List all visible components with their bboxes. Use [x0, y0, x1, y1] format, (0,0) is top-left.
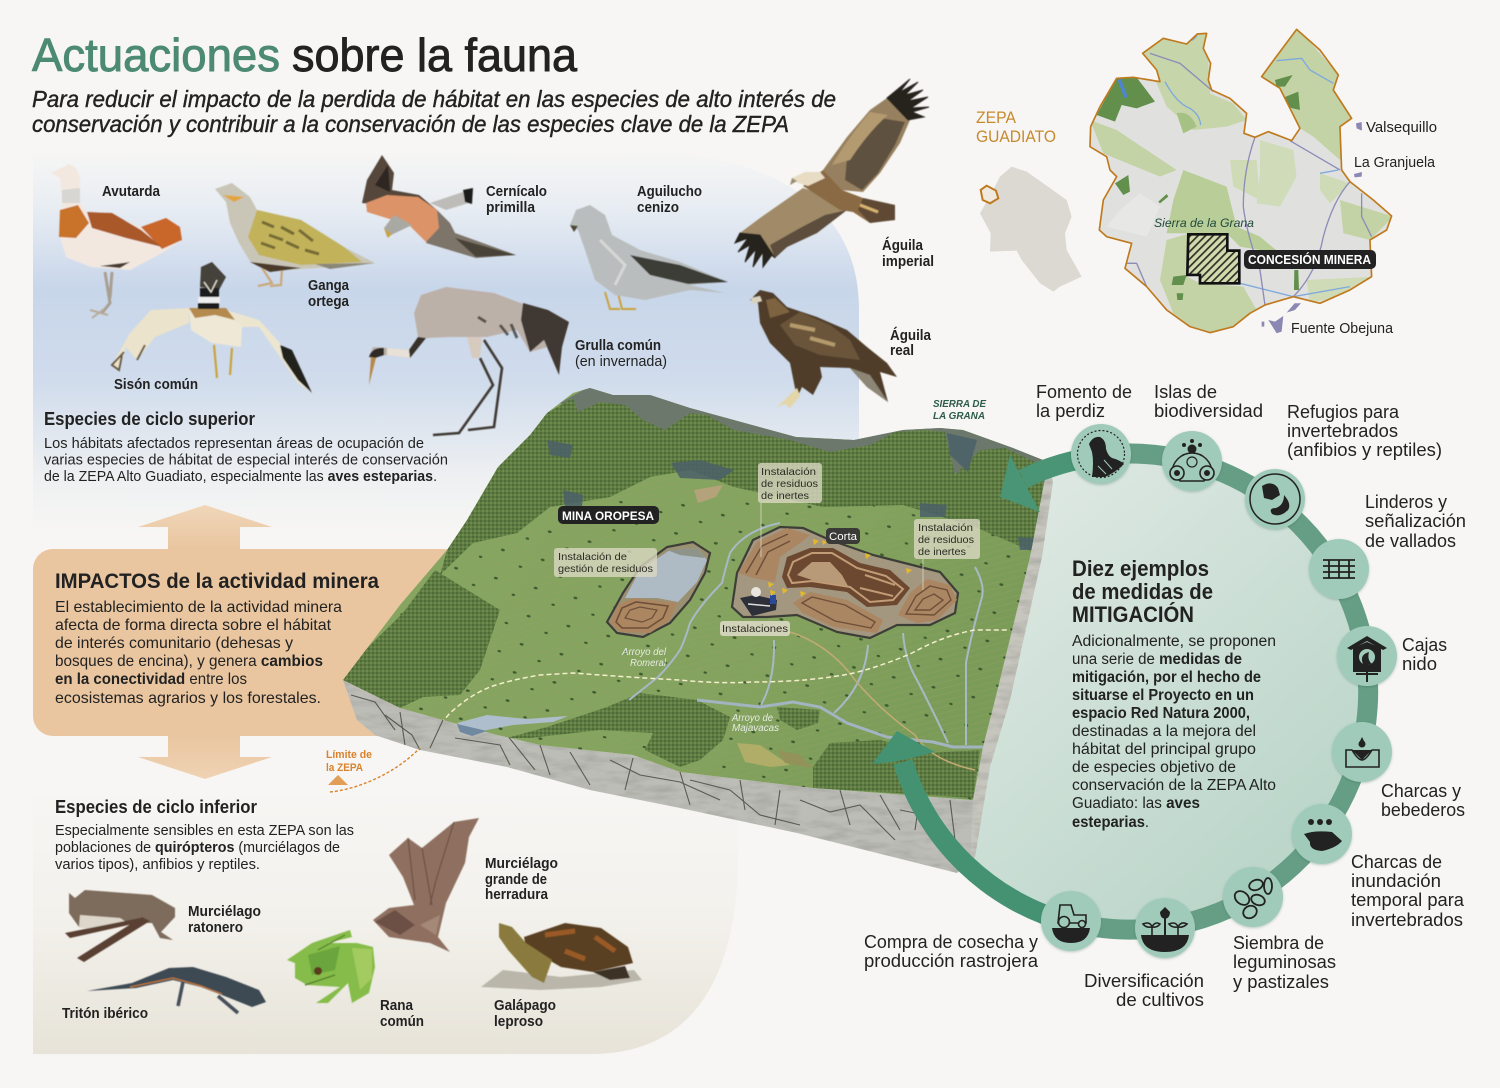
- ring labels: leguminosas: [1233, 952, 1336, 972]
- map label: ZEPA Guadiato: [976, 109, 1056, 146]
- bird labels: Águila: [890, 327, 932, 344]
- text: impactos: de interés comunitario (dehesas y: [55, 635, 293, 652]
- bird labels: Avutarda: [102, 184, 161, 200]
- text: diez ejemplos de mitigación: hábitat del principal grupo: [1072, 741, 1256, 758]
- terrain label: Arroyo del Romeral: [621, 647, 667, 669]
- terrain label: Sierra de la Grana: LA GRANA: [933, 410, 985, 422]
- ring labels: Compra de cosecha y: [864, 932, 1038, 952]
- ring labels: nido: [1402, 654, 1437, 674]
- text: especies de ciclo superior: de la ZEPA Alto Guadiato, especialmente las aves esteparias.: [44, 468, 437, 485]
- pond: [457, 715, 568, 730]
- badge: concesión minera: CONCESIÓN MINERA: [1248, 252, 1371, 267]
- text: diez ejemplos de mitigación: MITIGACIÓN: [1072, 602, 1194, 627]
- text: impactos: ecosistemas agrarios y los forestales.: [55, 690, 321, 707]
- terrain label: Arroyo de Majavacas: Arroyo de: [731, 713, 773, 724]
- lower animal labels: leproso: [494, 1014, 543, 1030]
- terrain label: Arroyo de Majavacas: [731, 713, 779, 734]
- animal: tritón ibérico: [87, 967, 266, 1013]
- animal: rana común: [287, 930, 375, 1003]
- callout: límite de la ZEPA: la ZEPA: [326, 762, 363, 774]
- animal: galápago leproso: [481, 923, 642, 990]
- lower animal labels: Tritón ibérico: [62, 1006, 148, 1022]
- right rock face: [970, 462, 1053, 862]
- lower animal labels: común: [380, 1014, 424, 1030]
- mountain rock: [560, 386, 1048, 480]
- panel: impactos: [33, 549, 463, 736]
- terrain label: residuos de inertes 2: Instalación: [918, 522, 973, 534]
- subtitle: [32, 86, 836, 137]
- ring labels: temporal para: [1351, 890, 1465, 910]
- limit dashed: [443, 629, 1010, 720]
- text: diez ejemplos de mitigación: mitigación, por el hecho de: [1072, 669, 1261, 686]
- icon: caja nido: [1337, 626, 1397, 686]
- locator map: Córdoba province: [980, 167, 1082, 292]
- lower animal labels: [62, 856, 558, 1030]
- text: impactos: bosques de encina), y genera cambios: [55, 653, 323, 670]
- text: especies de ciclo inferior: poblaciones de quirópteros (murciélagos de: [55, 840, 340, 856]
- bird labels: real: [890, 343, 914, 359]
- bird labels: Aguilucho: [637, 184, 702, 200]
- text: diez ejemplos de mitigación: una serie de medidas de: [1072, 651, 1242, 668]
- rivers: [697, 700, 983, 747]
- bird: aguilucho cenizo: [570, 205, 728, 309]
- bird: sisón común: [112, 262, 312, 393]
- terrain label: Sierra de la Grana: [933, 398, 987, 422]
- title: [32, 29, 577, 81]
- icon: vallado: [1309, 539, 1369, 599]
- ring labels: y pastizales: [1233, 972, 1329, 992]
- ring labels: producción rastrojera: [864, 951, 1039, 971]
- bird labels: (en invernada): [575, 354, 667, 370]
- text: diez ejemplos de mitigación: Adicionalmente, se proponen: [1072, 633, 1276, 650]
- terrain label: Arroyo del Romeral: Romeral: [630, 658, 667, 669]
- dark patches in forest: [547, 433, 1034, 550]
- text: diez ejemplos de mitigación: de medidas de: [1072, 579, 1213, 604]
- terrain label: Instalaciones: Instalaciones: [722, 623, 788, 635]
- text: impactos: IMPACTOS de la actividad minera: [55, 570, 379, 593]
- ring labels: Linderos y: [1365, 492, 1447, 512]
- text: especies de ciclo superior: Los hábitats afectados representan áreas de ocupación de: [44, 435, 424, 452]
- map label: ZEPA Guadiato: GUADIATO: [976, 128, 1056, 146]
- bird: ganga ortega: [215, 183, 375, 286]
- map labels: Sierra de la Grana: [1154, 216, 1254, 230]
- bird labels: Grulla común: [575, 338, 661, 354]
- subtitle: Para reducir el impacto de la perdida de hábitat en las especies de alto interés de: [32, 86, 836, 112]
- text: especies de ciclo inferior: Especies de ciclo inferior: [55, 797, 257, 817]
- ring labels: [864, 382, 1466, 1010]
- callout: límite de la ZEPA: Límite de: [326, 749, 372, 761]
- map label: ZEPA Guadiato: ZEPA: [976, 109, 1016, 127]
- ring labels: biodiversidad: [1154, 401, 1263, 421]
- map labels: La Granjuela: [1354, 155, 1436, 171]
- lower animal labels: ratonero: [188, 920, 243, 936]
- ring labels: la perdiz: [1036, 401, 1105, 421]
- lower forests: [507, 693, 730, 767]
- text: impactos: afecta de forma directa sobre el hábitat: [55, 617, 332, 634]
- ring labels: Charcas de: [1351, 852, 1442, 872]
- bird labels: Sisón común: [114, 377, 198, 393]
- ring labels: Islas de: [1154, 382, 1217, 402]
- terrain label: residuos de inertes 1: de residuos: [761, 478, 818, 490]
- terrain label: Arroyo de Majavacas: Majavacas: [732, 723, 779, 734]
- terrain label: gestión de residuos: [554, 548, 657, 577]
- bird: cernícalo primilla: [362, 155, 516, 258]
- lower animal labels: Murciélago: [188, 904, 261, 920]
- bird labels: ortega: [308, 294, 350, 310]
- bird labels: cenizo: [637, 200, 679, 216]
- ring labels: señalización: [1365, 511, 1466, 531]
- lower animal labels: Galápago: [494, 998, 556, 1014]
- bird labels: Ganga: [308, 278, 350, 294]
- terrain label: residuos de inertes 2: de inertes: [918, 546, 966, 558]
- terrain label: residuos de inertes 1: de inertes: [761, 490, 809, 502]
- ring labels: invertebrados: [1351, 910, 1463, 930]
- bird: avutarda: [51, 164, 182, 318]
- mitigation circle fill: [892, 454, 1368, 930]
- text: diez ejemplos de mitigación: conservación de la ZEPA Alto: [1072, 777, 1276, 794]
- cracks: [351, 695, 958, 870]
- text: especies de ciclo inferior: Especialmente sensibles en esta ZEPA son las: [55, 823, 354, 839]
- title: sobre la fauna: [292, 29, 577, 81]
- bird labels: imperial: [882, 254, 934, 270]
- panel: lower species background: [33, 782, 738, 1054]
- bird: águila imperial: [735, 79, 929, 267]
- terrain label: Corta: Corta: [829, 531, 858, 543]
- arrow: down: [138, 736, 272, 779]
- terrain label: gestión de residuos: gestión de residuos: [558, 563, 653, 575]
- ring labels: bebederos: [1381, 800, 1465, 820]
- ring labels: de vallados: [1365, 531, 1456, 551]
- text: diez ejemplos de mitigación: espacio Red Natura 2000,: [1072, 705, 1250, 722]
- icon: charcas y bebederos: [1332, 722, 1392, 782]
- map labels: Fuente Obejuna: [1291, 321, 1394, 337]
- title: Actuaciones: [32, 29, 280, 81]
- lower animal labels: grande de: [485, 872, 547, 888]
- pond runoff on cliff: [457, 724, 487, 736]
- bird labels: [102, 184, 934, 393]
- ring icons: [1041, 424, 1397, 958]
- text: especies de ciclo superior: varias especies de hábitat de especial interés de conservación: [44, 452, 448, 468]
- map: ZEPA Alto Guadiato: [1090, 27, 1393, 333]
- text: diez ejemplos de mitigación: destinadas a la mejora del: [1072, 723, 1256, 740]
- terrain label: Corta: [826, 528, 860, 544]
- terrain label: residuos de inertes 2: de residuos: [918, 534, 974, 546]
- map labels: Valsequillo: [1366, 120, 1437, 136]
- terrain label: gestión de residuos: Instalación de: [558, 551, 627, 563]
- left forest: [343, 570, 500, 708]
- terrain label: residuos de inertes 2: [914, 519, 980, 590]
- bird: grulla común: [369, 287, 569, 435]
- lower animal labels: Murciélago: [485, 856, 558, 872]
- ring labels: Cajas: [1402, 635, 1447, 655]
- installations: [740, 595, 777, 616]
- text: especies de ciclo inferior: varios tipos), anfibios y reptiles.: [55, 857, 260, 873]
- ring labels: de cultivos: [1116, 990, 1204, 1010]
- text: impactos: en la conectividad entre los: [55, 671, 247, 688]
- ring labels: Charcas y: [1381, 781, 1461, 801]
- icon: diversificación de cultivos: [1135, 898, 1195, 958]
- text: impactos: El establecimiento de la actividad minera: [55, 599, 342, 616]
- lower animal labels: Rana: [380, 998, 414, 1014]
- icon: leguminosas: [1223, 867, 1283, 927]
- lower animal labels: herradura: [485, 887, 549, 903]
- callout: límite de la ZEPA: [326, 748, 420, 792]
- text: diez ejemplos de mitigación: de especies objetivo de: [1072, 759, 1236, 776]
- icon: refugios invertebrados: [1245, 469, 1305, 529]
- text: diez ejemplos de mitigación: esteparias.: [1072, 814, 1149, 831]
- text: diez ejemplos de mitigación: Diez ejemplos: [1072, 556, 1209, 581]
- open pit mine: [732, 527, 958, 638]
- road: [790, 632, 975, 770]
- ring labels: Fomento de: [1036, 382, 1132, 402]
- icon: perdiz: [1071, 424, 1131, 484]
- animal: murciélago de herradura: [373, 818, 479, 952]
- animal: murciélago ratonero: [65, 890, 175, 962]
- front rock face: [343, 680, 975, 873]
- icon: charcas de inundación: [1292, 804, 1352, 864]
- panel: upper species background: [33, 150, 859, 535]
- text: especies de ciclo superior: Especies de ciclo superior: [44, 409, 255, 429]
- text: diez ejemplos de mitigación: situarse el Proyecto en un: [1072, 687, 1254, 704]
- bird labels: Águila: [882, 237, 924, 254]
- text: impactos: [55, 570, 379, 707]
- text: diez ejemplos de mitigación: [1072, 556, 1276, 831]
- ring labels: invertebrados: [1287, 421, 1398, 441]
- grass top surface: [343, 388, 1048, 800]
- waste facility: [607, 542, 710, 637]
- terrain label: residuos de inertes 1: [758, 463, 822, 557]
- icon: islas de biodiversidad: [1162, 431, 1222, 491]
- terrain label: Arroyo del Romeral: Arroyo del: [621, 647, 667, 658]
- terrain label: residuos de inertes 1: Instalación: [761, 466, 816, 478]
- ring labels: Diversificación: [1084, 971, 1204, 991]
- ring labels: Siembra de: [1233, 933, 1324, 953]
- arrow: up: [138, 505, 272, 549]
- terrain label: Mina Oropesa: MINA OROPESA: [562, 509, 654, 523]
- map labels: [1154, 120, 1437, 337]
- bird labels: primilla: [486, 200, 536, 216]
- text: especies de ciclo superior: [44, 409, 448, 485]
- bird: águila real: [750, 290, 897, 408]
- terrain label: Sierra de la Grana: SIERRA DE: [933, 398, 987, 410]
- ring labels: Refugios para: [1287, 402, 1400, 422]
- bird labels: Cernícalo: [486, 184, 547, 200]
- subtitle: conservación y contribuir a la conservación de las especies clave de la ZEPA: [32, 111, 789, 137]
- ring labels: inundación: [1351, 871, 1441, 891]
- terrain block: [340, 385, 1060, 873]
- text: diez ejemplos de mitigación: Guadiato: las aves: [1072, 795, 1200, 812]
- text: especies de ciclo inferior: [55, 797, 354, 873]
- upper forest: [440, 398, 1048, 575]
- icon: compra de cosecha: [1041, 891, 1101, 951]
- mitigation ring: [872, 454, 1368, 930]
- ring labels: (anfibios y reptiles): [1287, 440, 1442, 460]
